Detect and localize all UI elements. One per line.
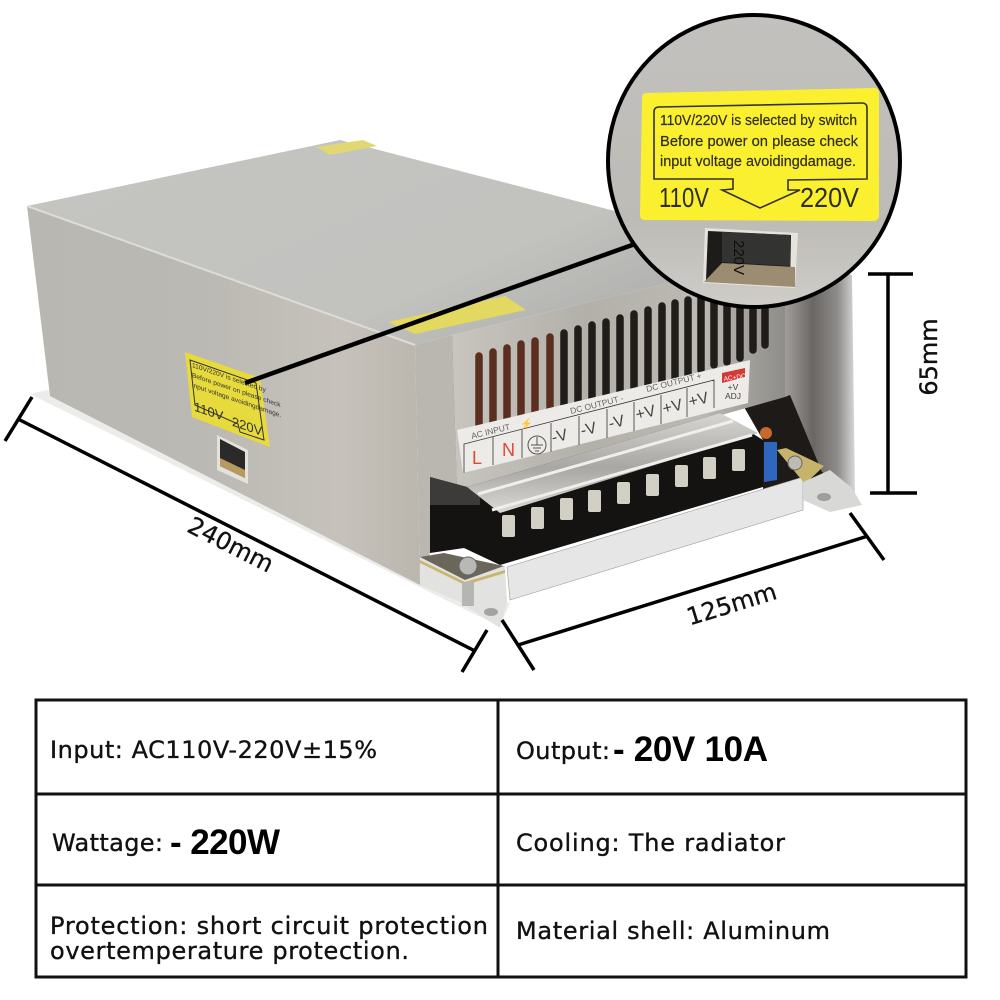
terminal block [430,413,763,565]
wattage spec: Wattage: [52,829,163,857]
side yellow label: input voltage avoidingdamage. [192,382,281,419]
terminal label strip: -V [550,426,570,447]
front left strip [415,335,457,585]
protection spec [50,912,488,965]
side yellow label: 110V [194,399,223,424]
pointer line to zoom circle [245,244,635,383]
wattage spec: - 220W [170,823,280,862]
output spec [516,730,768,769]
voltage selector switch: 220V [730,240,747,275]
zoom circle detail [608,15,900,307]
cooling spec: Cooling: The radiator [516,829,785,857]
protection spec: Protection: short circuit protection [50,912,488,940]
output spec: Output: [516,737,610,765]
terminal label strip: -V [579,419,599,440]
specification table [36,700,966,977]
side yellow label: 110V/220V is selected by [192,362,266,394]
terminal label strip: DC OUTPUT - [569,393,625,416]
terminal label strip: +V [661,396,685,418]
output spec: - 20V 10A [613,730,768,769]
side switch window [217,435,248,484]
material spec: Material shell: Aluminum [516,917,830,945]
terminal label strip: ADJ [725,391,741,401]
adjust potentiometer [760,427,777,482]
dimension: 65mm: 65mm [915,318,943,396]
right side section [785,255,855,493]
input spec: Input: AC110V-220V±15% [50,736,377,764]
protection spec: overtemperature protection. [50,937,409,965]
terminal screws [513,443,762,533]
dark cavity right of terminals [740,385,825,490]
yellow warning label: 110V/220V is selected by switch [660,113,857,129]
yellow warning label: 220V [800,182,859,213]
dimension: 125mm: 125mm [683,577,780,631]
yellow warning label [640,88,879,221]
top face [27,140,785,345]
yellow warning label: 110V [659,182,709,213]
terminal label strip: +V [634,402,658,424]
terminal label strip: L [472,448,482,468]
right mount flange [777,448,862,512]
bottom silver plate [507,477,803,600]
yellow warning label: Before power on please check [660,134,859,150]
power supply unit [27,140,862,628]
terminal label strip: +V [728,382,739,392]
vent panel [452,282,785,487]
terminal label strip: ⚡ [520,417,532,430]
terminal label strip: AC INPUT [470,422,511,441]
terminal label strip [457,360,750,473]
terminal label strip: DC OUTPUT + [645,370,703,394]
terminal label strip: AC+DC [723,373,747,383]
terminal label strip: +V [687,389,711,411]
dimension: 240mm: 240mm [183,511,278,578]
terminal label strip: -V [607,412,627,433]
left side face [27,206,420,585]
base flange [30,390,510,626]
dimension: 240mm [5,397,487,672]
side yellow label: 220V [232,414,262,439]
voltage selector switch [703,228,798,288]
dimension: 125mm [502,513,884,670]
transparent cover [467,413,758,513]
side yellow label: Before power on please check [192,372,281,409]
side yellow label [185,352,281,447]
yellow warning label: input voltage avoidingdamage. [660,154,856,170]
left mount foot [420,553,507,628]
terminal label strip: N [502,440,515,460]
wattage spec [52,823,280,862]
